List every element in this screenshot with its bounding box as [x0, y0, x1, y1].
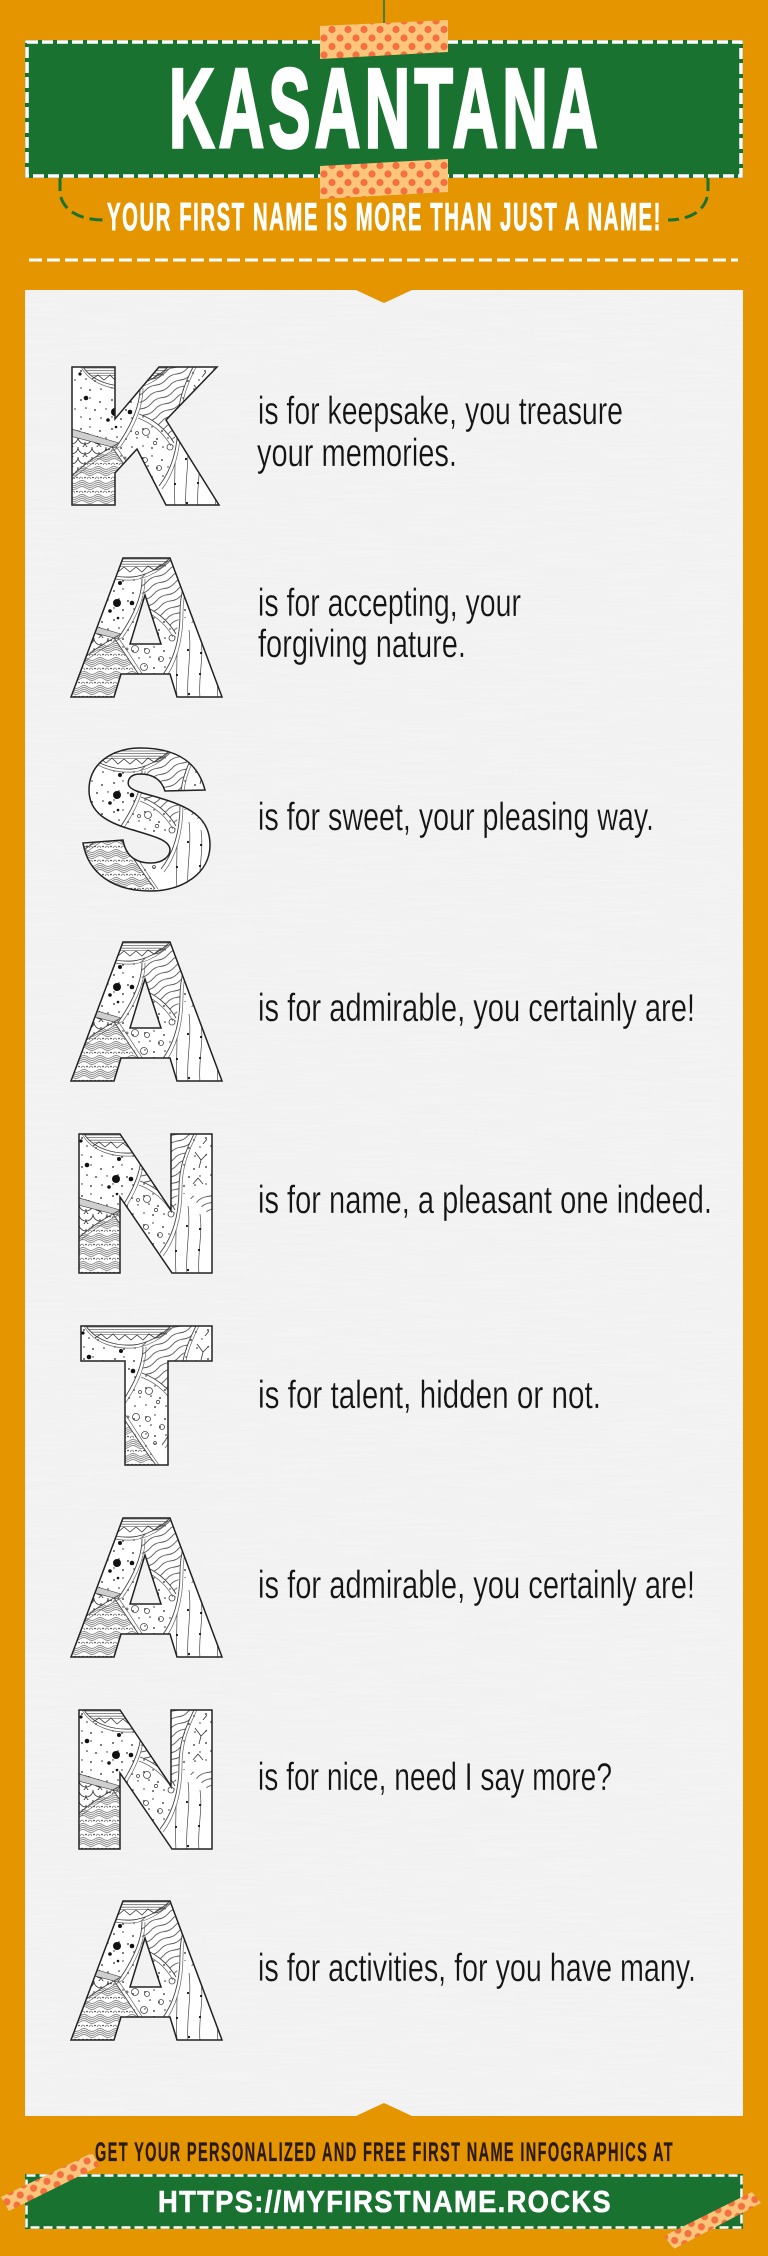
hanging string [383, 0, 385, 24]
text: A: is for accepting, your [258, 582, 521, 625]
letter N icon [78, 1133, 213, 1274]
text: N: is for nice, need I say more? [258, 1756, 612, 1799]
letter K icon [71, 366, 220, 506]
letter A icon [70, 941, 223, 1082]
text: K: is for keepsake, you treasure [258, 390, 623, 433]
text: A: forgiving nature. [258, 623, 466, 666]
letter A icon [70, 557, 223, 698]
text: A [258, 582, 521, 666]
letter T icon [80, 1325, 213, 1466]
tape: top [320, 20, 448, 59]
letter A icon [70, 1900, 223, 2041]
tape: footer right [664, 2192, 761, 2249]
tape: bottom [320, 159, 448, 199]
footer URL banner [25, 2174, 743, 2229]
title banner [25, 40, 743, 178]
dashed divider [29, 258, 738, 262]
text: K: your memories. [257, 432, 457, 475]
footer URL banner: HTTPS://MYFIRSTNAME.ROCKS [158, 2184, 612, 2219]
text: T: is for talent, hidden or not. [258, 1374, 601, 1417]
letter S icon [82, 747, 211, 892]
panel: letters [25, 290, 743, 2116]
letter A icon [70, 1517, 223, 1658]
tape: footer left [1, 2153, 100, 2211]
letter N icon [78, 1709, 213, 1850]
dashed connector: right [668, 178, 708, 220]
text: K [257, 390, 623, 475]
dashed connector: left [60, 178, 103, 220]
